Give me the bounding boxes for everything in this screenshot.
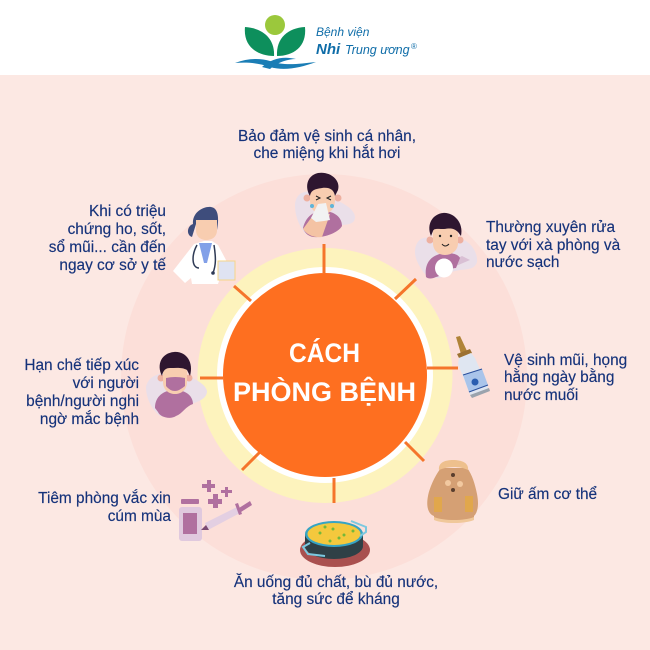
logo icon xyxy=(235,15,316,69)
icon: winter coat xyxy=(427,460,478,523)
text: limit contact: Hạn chế tiếp xúc xyxy=(24,357,139,374)
center title: CÁCH xyxy=(289,337,360,368)
icon: nasal spray bottle xyxy=(456,336,490,398)
icon: dish of food xyxy=(300,521,370,567)
text: vaccination: Tiêm phòng vắc xin xyxy=(38,490,171,507)
outer circle xyxy=(121,174,527,580)
logo text: Nhi xyxy=(316,41,341,58)
text: see a doctor: Khi có triệu xyxy=(89,203,166,220)
text: see a doctor: sổ mũi... cần đến xyxy=(49,239,166,256)
text: nose and throat: Vệ sinh mũi, họng xyxy=(504,352,627,369)
center circle: PHÒNG BỆNH xyxy=(233,376,416,407)
text: see a doctor: chứng ho, sốt, xyxy=(68,221,166,238)
text: limit contact: với người xyxy=(73,375,139,392)
text: nutrition: Ăn uống đủ chất, bù đủ nước, xyxy=(234,574,438,591)
text: hand washing: tay với xà phòng và xyxy=(486,237,621,254)
icon: doctor xyxy=(173,207,235,284)
text: nose and throat: hằng ngày bằng xyxy=(504,369,614,386)
icon: person wearing mask xyxy=(146,352,207,418)
text: hygiene: che miệng khi hắt hơi xyxy=(254,145,400,162)
text: nose and throat: nước muối xyxy=(504,387,578,404)
logo text: ® xyxy=(411,42,417,51)
yellow ring xyxy=(198,248,452,503)
text: vaccination: cúm mùa xyxy=(108,508,171,525)
text: keep warm: Giữ ấm cơ thể xyxy=(498,486,597,503)
text: hygiene: Bảo đảm vệ sinh cá nhân, xyxy=(238,128,416,145)
white ring xyxy=(217,267,433,483)
logo text: Bệnh viện xyxy=(316,25,370,39)
text: hand washing: nước sạch xyxy=(486,254,559,271)
icon: person washing hands xyxy=(415,213,477,278)
text: limit contact: ngờ mắc bệnh xyxy=(40,411,139,428)
connector lines xyxy=(200,244,458,503)
icon: vaccine and syringe xyxy=(179,480,252,541)
text: hand washing: Thường xuyên rửa xyxy=(486,219,616,236)
logo text: Trung ương xyxy=(345,43,410,57)
text: limit contact: bệnh/người nghi xyxy=(26,393,139,410)
logo xyxy=(235,15,417,69)
text: nutrition: tăng sức để kháng xyxy=(272,591,400,608)
icon: person sneezing xyxy=(295,173,355,237)
logo text xyxy=(316,25,417,58)
center circle xyxy=(223,273,427,477)
text: see a doctor: ngay cơ sở y tế xyxy=(59,257,166,274)
